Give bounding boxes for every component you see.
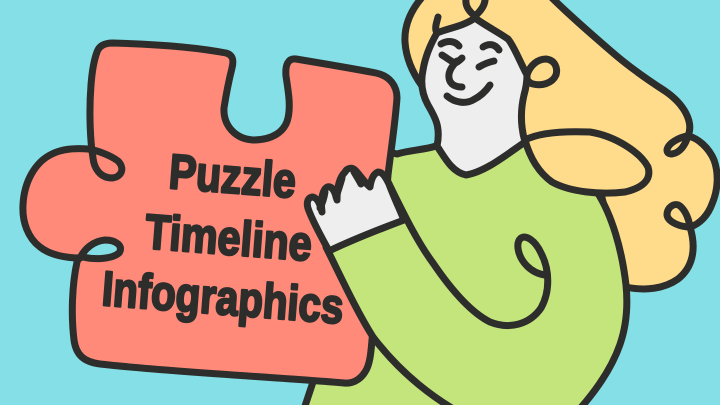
body: sweater torso xyxy=(303,143,627,405)
arm and sleeve xyxy=(307,168,560,405)
title: Puzzle: Puzzle xyxy=(167,145,298,209)
smile xyxy=(447,85,490,102)
ear curl xyxy=(527,59,557,85)
hair curl: right upper xyxy=(667,136,688,154)
sleeve outer edge xyxy=(326,247,455,405)
sleeve inner edge with curl xyxy=(388,182,548,326)
right eye xyxy=(479,61,494,67)
nose xyxy=(449,61,462,87)
right eyebrow xyxy=(483,45,499,50)
fringe strand xyxy=(436,17,438,33)
hair xyxy=(405,0,717,289)
hair curl: top of head xyxy=(466,0,485,16)
title: Infographics: Infographics xyxy=(100,262,346,335)
left eyebrow xyxy=(441,42,459,46)
hair strand loop over shoulder xyxy=(525,132,649,193)
hair curl: right lower xyxy=(667,205,690,227)
puzzle piece xyxy=(23,43,397,383)
winking left eye xyxy=(442,55,462,63)
face and neck xyxy=(422,17,557,175)
title: Timeline: Timeline xyxy=(143,205,314,272)
hand xyxy=(307,168,404,251)
finger creases xyxy=(320,172,361,208)
